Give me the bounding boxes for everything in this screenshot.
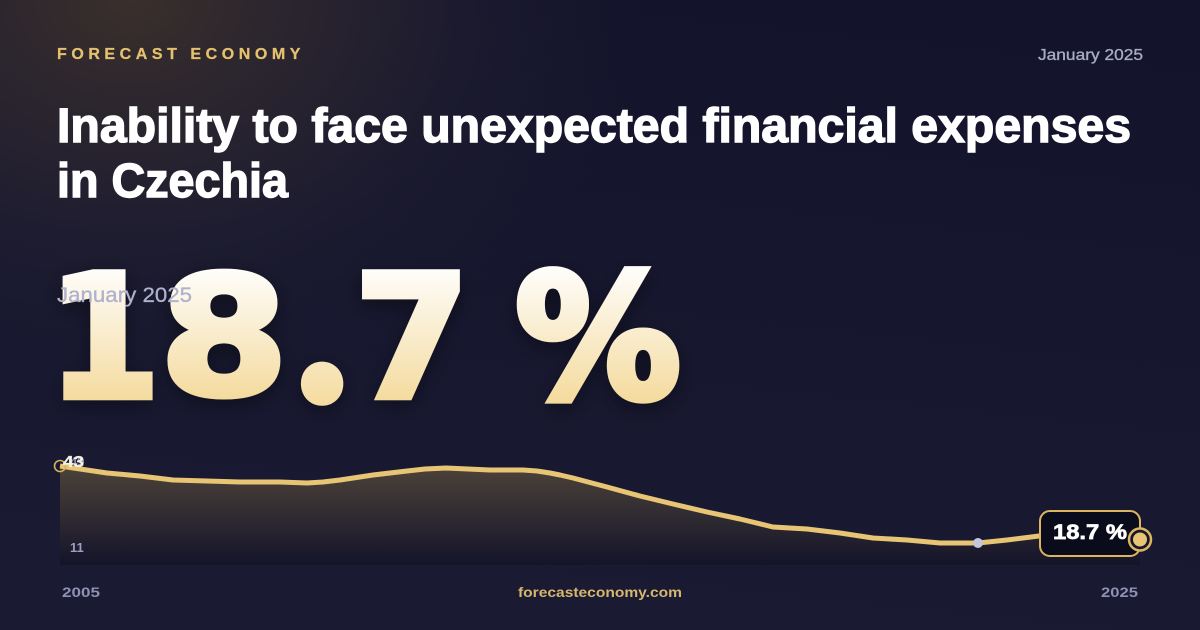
x axis end: 2025 xyxy=(1101,584,1138,600)
overlapping date label: January 2025 xyxy=(57,284,192,307)
big value: . xyxy=(287,171,357,461)
low point marker xyxy=(973,538,983,548)
axis label: min: 11 xyxy=(70,540,84,555)
big value: 7 xyxy=(354,238,470,437)
brand label: FORECAST ECONOMY xyxy=(57,46,305,63)
date: January 2025 xyxy=(1038,47,1143,64)
big value: 1 xyxy=(47,239,161,438)
callout xyxy=(1040,511,1140,556)
big value: % xyxy=(515,238,681,438)
title: in Czechia xyxy=(57,155,288,208)
end marker ring xyxy=(1129,528,1151,550)
end marker dot xyxy=(1133,532,1147,546)
big value: 8 xyxy=(160,243,288,434)
x axis start: 2005 xyxy=(62,584,100,600)
title xyxy=(57,100,1131,208)
title: Inability to face unexpected financial expenses xyxy=(57,100,1131,153)
big value xyxy=(47,171,681,461)
callout: 18.7 % xyxy=(1053,521,1127,544)
source url: forecasteconomy.com xyxy=(518,584,682,600)
area fill xyxy=(60,466,1140,565)
trend line xyxy=(60,466,1100,543)
axis label: ghost max: 49 xyxy=(70,454,84,469)
start marker xyxy=(54,460,66,472)
axis label: max: 43 xyxy=(63,454,84,471)
area chart xyxy=(54,454,1151,565)
